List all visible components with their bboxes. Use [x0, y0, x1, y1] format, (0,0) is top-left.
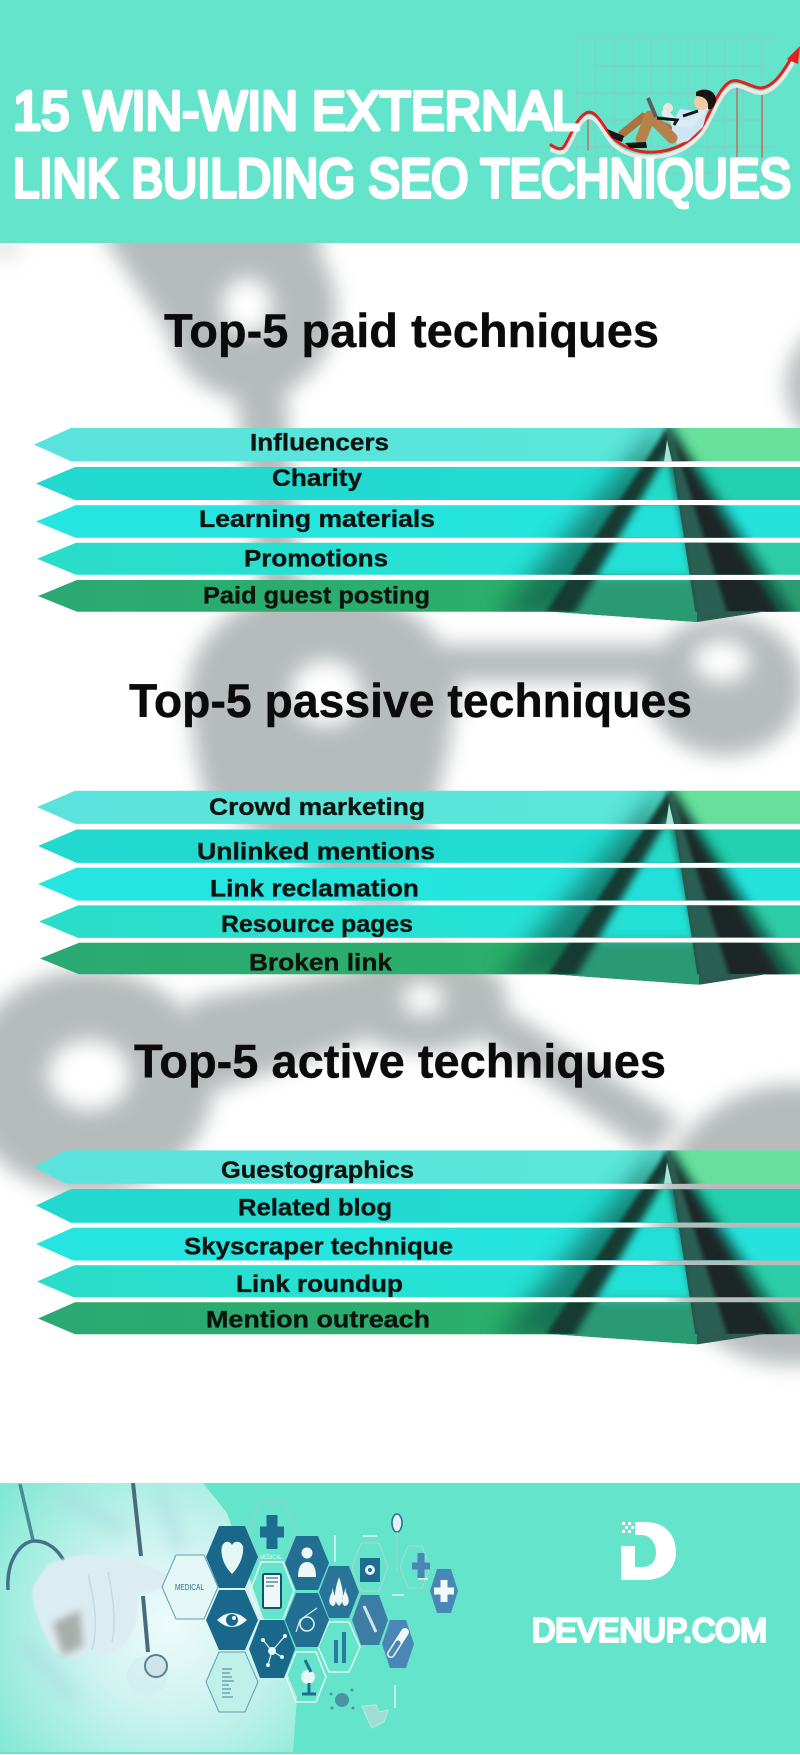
bar: Related blog: Related blog: [238, 1194, 392, 1221]
icon: floating node: [392, 1514, 402, 1572]
heading: active: Top-5 active techniques: [134, 1034, 666, 1088]
chart grid behind the man: [577, 39, 775, 178]
outline hexagons: [162, 1501, 430, 1712]
title: [13, 80, 791, 209]
man reclining with a laptop: [607, 90, 716, 148]
label: medical: MEDICAL: [175, 1582, 204, 1592]
panel: header banner: [0, 0, 800, 243]
bar: Promotions: [37, 543, 800, 575]
bar: Skyscraper technique: [36, 1228, 800, 1260]
pyramid graphic: [498, 781, 800, 991]
bar: Mention outreach: [38, 1302, 800, 1334]
bar: Learning materials: Learning materials: [199, 506, 435, 533]
bar: Promotions: Promotions: [244, 546, 388, 573]
bar: Unlinked mentions: Unlinked mentions: [197, 838, 435, 865]
bar: Mention outreach: Mention outreach: [206, 1307, 430, 1334]
panel: active techniques pyramid list: [34, 1140, 800, 1350]
icon: microscope: [301, 1660, 316, 1694]
brand name: DEVENUP.COM: [532, 1612, 767, 1648]
faint caption marks: [335, 1535, 428, 1708]
icon hexagon: person: [285, 1536, 329, 1590]
bar: Influencers: [34, 428, 800, 461]
icon hexagon: drops: [319, 1566, 359, 1618]
icon: medical bag: [360, 1558, 380, 1582]
bar: Link reclamation: Link reclamation: [210, 875, 419, 902]
hex text lines: [222, 1669, 234, 1697]
background: blurred grey network of rings: [0, 170, 800, 1365]
bar: Skyscraper technique: Skyscraper technique: [184, 1234, 453, 1260]
bar: Learning materials: [36, 505, 800, 538]
icon hexagon: pill: [382, 1620, 414, 1668]
bar: Guestographics: Guestographics: [221, 1157, 414, 1184]
icon: test tubes: [336, 1632, 344, 1663]
bar: Charity: [36, 465, 800, 500]
doctor in white coat: [0, 1483, 297, 1752]
icon: medical cross: [260, 1515, 284, 1549]
panel: footer banner: [0, 1483, 800, 1754]
bar: Crowd marketing: [37, 791, 800, 824]
panel: passive techniques pyramid list: [37, 781, 800, 991]
icon hexagon: molecule: [249, 1620, 295, 1678]
icon hexagon: wheelchair: [285, 1593, 329, 1647]
icon hexagon: heart: [206, 1526, 258, 1588]
heading: paid: Top-5 paid techniques: [164, 304, 659, 357]
title: 15 WIN-WIN EXTERNAL: [13, 80, 580, 142]
icon: clipboard: [263, 1574, 281, 1608]
bar: Link reclamation: [38, 868, 800, 902]
rising red trend line with arrow: [551, 46, 800, 157]
pyramid graphic: [496, 1140, 798, 1350]
bar: Charity: Charity: [272, 465, 363, 492]
bar: Resource pages: Resource pages: [221, 911, 413, 938]
icon hexagon: small cross: [430, 1569, 458, 1613]
label: small medical: MEDICAL: [260, 1555, 283, 1561]
icon hexagon: eye: [206, 1590, 258, 1650]
bar: Unlinked mentions: [38, 830, 800, 865]
bar: Guestographics: [34, 1150, 800, 1184]
icon hexagon: syringe: [352, 1595, 388, 1645]
icon: small blue cross: [412, 1553, 430, 1578]
bar: Paid guest posting: Paid guest posting: [203, 582, 430, 609]
bar: Crowd marketing: Crowd marketing: [209, 794, 425, 821]
bar: Influencers: Influencers: [250, 430, 389, 457]
logo: D mark: [621, 1522, 676, 1580]
icon: world map: [362, 1705, 388, 1728]
panel: paid techniques pyramid list: [34, 418, 800, 628]
bar: Related blog: [36, 1189, 800, 1223]
bar: Resource pages: [39, 905, 800, 938]
bar: Broken link: Broken link: [249, 949, 393, 976]
bar: Link roundup: Link roundup: [236, 1271, 403, 1298]
pyramid graphic: [496, 418, 798, 628]
heading: passive: Top-5 passive techniques: [129, 674, 692, 727]
icon: virus: [330, 1688, 354, 1710]
bar: Link roundup: [37, 1265, 800, 1298]
bar: Broken link: [40, 943, 800, 976]
bar: Paid guest posting: [38, 580, 800, 612]
